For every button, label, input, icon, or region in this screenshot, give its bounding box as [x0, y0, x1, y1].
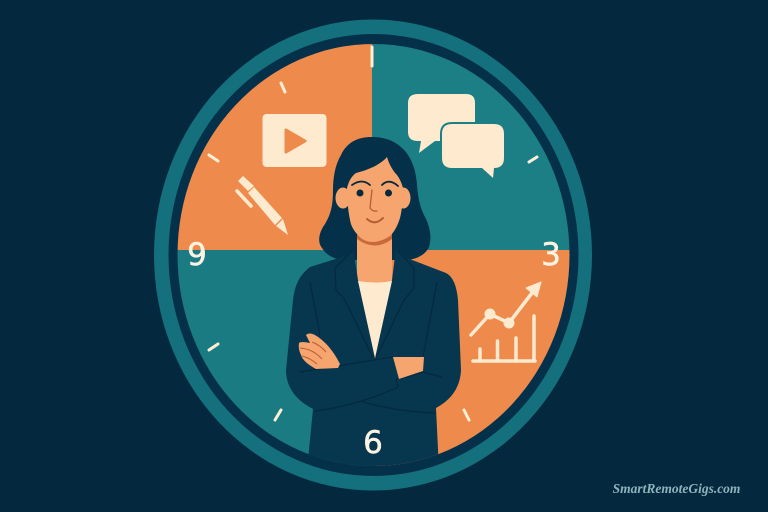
- clock outer ring: [154, 20, 592, 490]
- icon: chat bubbles: [408, 94, 504, 178]
- shirt: [358, 281, 392, 358]
- clock tick marks: [209, 47, 537, 420]
- lapels and jacket lines: [300, 250, 442, 413]
- icon: growth chart: [471, 282, 541, 361]
- numeral 6: 6: [363, 425, 383, 461]
- neck shadow: [357, 230, 392, 246]
- clock inner dark ring: [168, 34, 578, 476]
- right hand: [393, 357, 424, 379]
- numeral 3: 3: [541, 237, 561, 273]
- hair: [319, 137, 430, 260]
- neck: [357, 228, 392, 285]
- ears: [336, 188, 350, 208]
- watermark: SmartRemoteGigs.com: [613, 481, 740, 496]
- brows, nose and smile: [352, 182, 398, 222]
- numeral 9: 9: [187, 237, 207, 273]
- jacket: [286, 248, 461, 470]
- left hand: [299, 334, 340, 369]
- face: [347, 157, 403, 242]
- eyes: [356, 190, 364, 196]
- person: [286, 137, 461, 470]
- icon: pen: [237, 176, 288, 235]
- clock face quadrants: [170, 40, 577, 470]
- icon: video play: [262, 114, 326, 167]
